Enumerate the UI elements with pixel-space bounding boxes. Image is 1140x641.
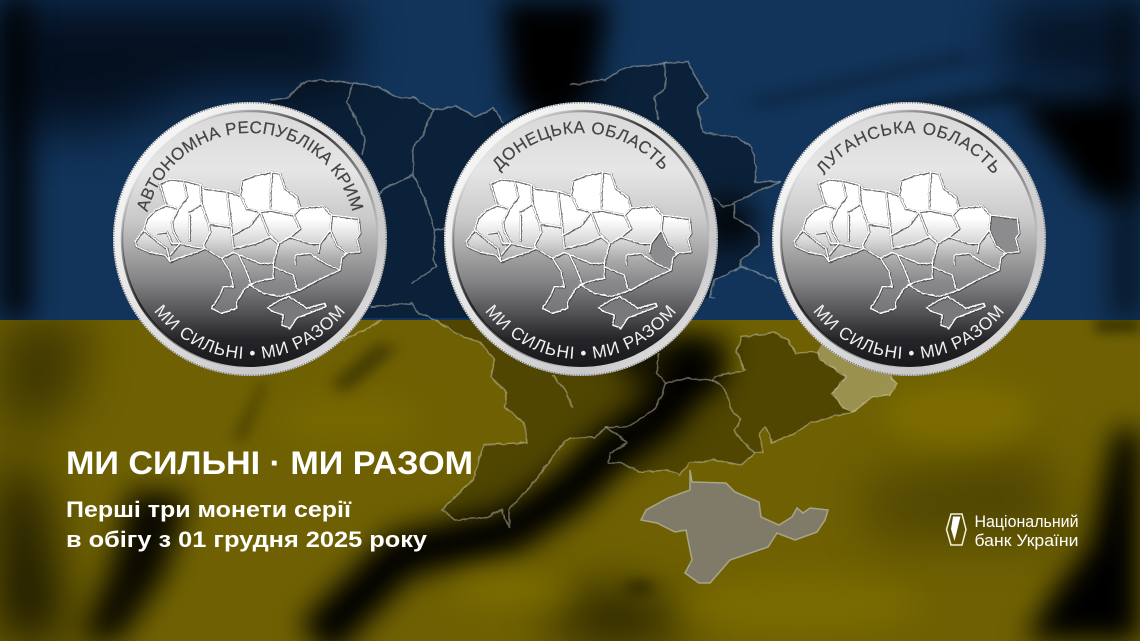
title: МИ СИЛЬНІ · МИ РАЗОМ [66, 445, 473, 481]
highlighted region: Luhansk [989, 215, 1019, 253]
flag: blue field [0, 0, 1140, 320]
coin face [453, 111, 709, 367]
coin title: АВТОНОМНА РЕСПУБЛІКА КРИМ [138, 121, 364, 212]
map: darkened north over blue [220, 62, 781, 318]
background map of Ukraine [220, 62, 897, 583]
coin: Luhansk oblast [772, 102, 1046, 376]
coin map [466, 172, 691, 329]
coin rim [444, 102, 718, 376]
coin title: ДОНЕЦЬКА ОБЛАСТЬ [493, 121, 666, 174]
subtitle line 2: в обігу з 01 грудня 2025 року [66, 527, 428, 552]
coin title: ЛУГАНСЬКА ОБЛАСТЬ [817, 121, 998, 176]
subtitle [66, 497, 428, 552]
flag: blue folds [0, 0, 1140, 320]
map: Donetsk oblast highlight [817, 330, 897, 412]
flag: yellow field [0, 320, 1140, 641]
map: darkened oblasts over yellow [436, 320, 854, 527]
coin map [135, 172, 360, 329]
logo icon [946, 514, 966, 545]
coin reeded edge [773, 103, 1045, 375]
coin face [122, 111, 378, 367]
flag: yellow folds [0, 320, 1140, 641]
coin motto: МИ СИЛЬНІ • МИ РАЗОМ [154, 304, 345, 359]
coin: Autonomous Republic of Crimea [113, 102, 387, 376]
logo wordmark: Національний [974, 513, 1078, 531]
logo wordmark [974, 513, 1078, 550]
coin reeded edge [445, 103, 717, 375]
map: oblast borders [271, 62, 897, 527]
coin face [781, 111, 1037, 367]
highlighted region: Crimea [267, 297, 326, 328]
coin rim [772, 102, 1046, 376]
coin rim [113, 102, 387, 376]
National Bank of Ukraine logo [946, 513, 1078, 550]
subtitle line 1: Перші три монети серії [66, 497, 352, 522]
coin motto: МИ СИЛЬНІ • МИ РАЗОМ [814, 304, 1004, 359]
map: Crimea highlight [641, 470, 828, 583]
highlighted region: Donetsk [649, 230, 678, 270]
coin: Donetsk oblast [444, 102, 718, 376]
coin map [794, 172, 1019, 329]
coin motto: МИ СИЛЬНІ • МИ РАЗОМ [486, 304, 676, 359]
logo wordmark: банк України [974, 532, 1078, 550]
coin reeded edge [114, 103, 386, 375]
flag: yellow highlights [280, 383, 1035, 635]
